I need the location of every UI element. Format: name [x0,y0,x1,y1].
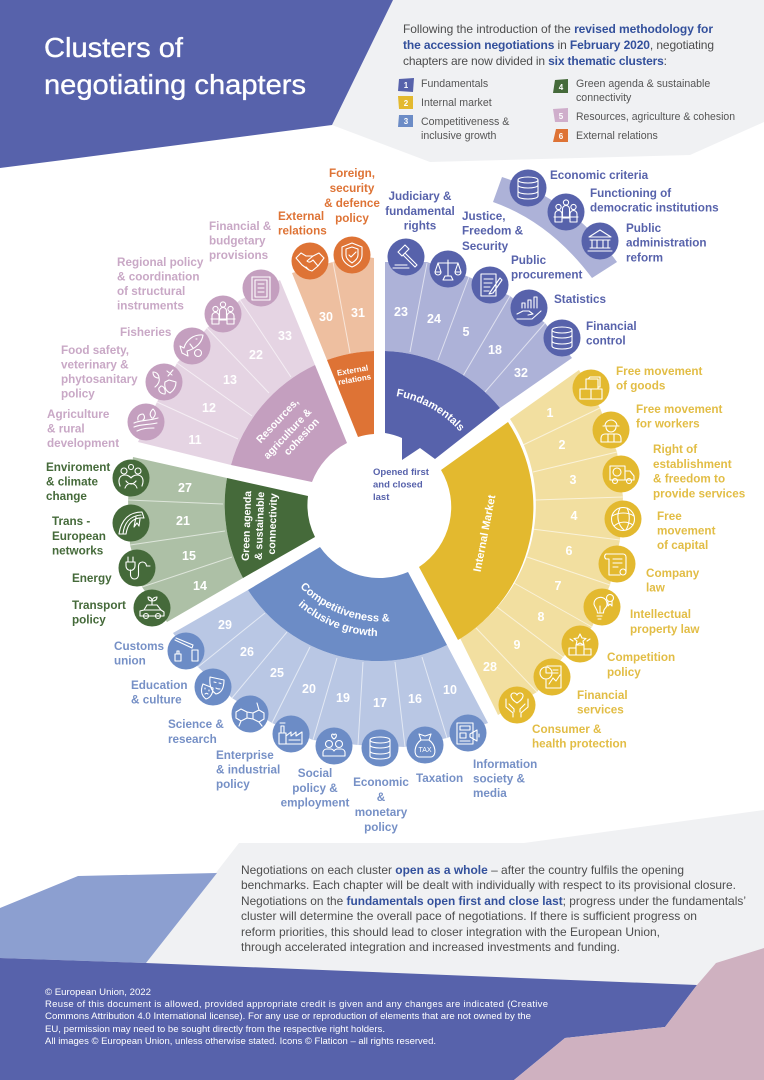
chapter labels: Resources: Fisheries [120,326,172,339]
chapter numbers [483,406,578,674]
icon: globe [604,500,642,538]
icon: fields [128,404,164,440]
legend item 1 [398,78,488,92]
title [44,32,306,100]
chapter numbers: 27 [178,481,192,495]
chapter labels: Fundamentals: Financial [586,320,637,333]
chapter labels: Green agenda: Enviroment [46,461,110,474]
icon: financial document [534,658,570,696]
cluster name: Internal Market: Internal Market [472,494,498,573]
chapter labels: External relations: policy [335,212,369,225]
cluster name: Fundamentals: Fundamentals [396,388,464,431]
chapter labels: Resources: & rural [47,422,85,436]
icon: car and plant [134,590,170,626]
legend [398,78,735,142]
legend item 4: Green agenda & sustainable [576,78,710,90]
icon: democratic institutions [548,194,584,230]
chapter labels: Green agenda: change [46,490,87,503]
legend item 1: 1 [404,81,409,90]
chapter numbers [188,329,292,447]
cluster name: Green agenda: connectivity [266,493,280,555]
panel: Internal Market cluster [419,365,746,750]
chapter labels: Resources: policy [61,388,95,400]
chapter labels: Internal Market: policy [607,666,641,679]
cluster name: External relations: External [336,363,369,378]
chapter labels: Competitiveness: media [473,787,507,800]
chapter numbers: 22 [249,348,263,362]
icon: podium [562,626,598,662]
icon: clipboard [242,270,280,306]
periwinkle shape [0,873,217,963]
chapter numbers: 15 [182,549,196,563]
icon: family and heart [316,728,352,764]
functioning of democratic institutions label: democratic institutions [590,202,719,214]
copyright text: © European Union, 2022 [45,987,151,998]
legend item 5: 5 [559,112,564,121]
body text: benchmarks. Each chapter will be dealt with individually with respect to its provisional closure. [241,878,736,892]
chapter numbers: 19 [336,691,350,705]
chapter labels: Green agenda: European [52,530,106,543]
chapter labels: Competitiveness: society & [473,772,526,786]
chapter labels: Green agenda: Trans - [52,515,90,528]
icon: three people [204,296,242,332]
cluster name: External relations: relations [337,372,372,387]
chapter labels: Resources: veterinary & [61,358,129,372]
panel: External relations cluster [278,167,380,437]
legend item 4 [553,78,710,104]
public administration reform label: reform [626,252,663,264]
chapter numbers [394,305,528,380]
cluster name: Green agenda: Green agenda [240,491,254,561]
chapter labels: Fundamentals: rights [404,220,437,232]
icon: public administration building [582,222,618,260]
legend item 6: 6 [559,132,564,141]
chapter numbers: 29 [218,618,232,632]
chapter labels: Internal Market: for workers [636,418,700,430]
chapter labels: Internal Market: Right of [653,443,697,456]
cluster name: Resources: agriculture & [261,406,315,462]
chapter labels: Fundamentals: control [586,334,626,348]
title: negotiating chapters [44,69,306,100]
chapter numbers: 31 [351,306,365,320]
chapter labels: Resources: Regional policy [117,256,203,269]
title: Clusters of [44,32,183,63]
chapter numbers: 12 [202,401,216,415]
chapter labels: Internal Market: Free movement [636,403,722,416]
chapter labels: Green agenda: & climate [46,476,98,488]
chapter numbers: 24 [427,312,441,326]
chapter labels: Resources: provisions [209,249,269,262]
icon: factory [272,716,310,752]
chapter labels: Internal Market: Competition [607,651,675,664]
cluster band: Resources [231,365,347,482]
icon: plug [118,550,156,586]
chapter labels: Fundamentals: Security [462,240,509,253]
legend item 2: Internal market [421,97,492,109]
panel: Fundamentals cluster [385,190,637,460]
chapter labels: Resources: Agriculture [47,408,109,421]
icon: worker [592,412,630,448]
legend item 2: 2 [404,99,409,108]
legend item 4: 4 [559,83,564,92]
chapter labels: Internal Market: establishment [653,458,732,471]
chapter labels: Internal Market: law [646,582,666,594]
cluster band: Competitiveness [248,547,447,661]
chapter labels: Competitiveness: Taxation [416,772,463,785]
chapter labels: Competitiveness: & [377,791,386,804]
cluster band: Fundamentals [385,351,500,460]
chapter labels: Competitiveness: employment [281,796,350,810]
chapter labels: Internal Market: Consumer & [532,723,602,736]
icon: tax bag [406,726,444,764]
body text: through accelerated integration and increased investments and funding. [241,940,620,954]
chapter labels: Resources: budgetary [209,234,266,248]
chapter labels: Competitiveness: Economic [353,776,409,789]
chapter labels: External relations: External [278,210,324,223]
chapter labels: Resources: development [47,437,119,450]
chapter numbers: 6 [566,544,573,558]
chapter labels: Internal Market: of goods [616,380,666,392]
chapter labels: Internal Market [532,365,746,750]
chapter labels: Internal Market: movement [657,524,716,538]
top grey background [332,0,764,162]
panel: administration arc [493,169,719,278]
cluster band: External relations [327,351,374,437]
bottom grey background [146,810,764,990]
icon: handshake [292,242,328,280]
chapter numbers: 26 [240,645,254,659]
icon: road bridge [112,504,150,542]
pink corner shape [514,948,764,1080]
chapter labels: Internal Market: property law [630,623,700,636]
title panel [0,0,393,168]
icon: gavel [388,238,424,276]
chapter labels: Competitiveness: research [168,733,217,746]
public administration reform label: Public [626,222,661,235]
chapter labels: Competitiveness: Customs [114,640,164,653]
chapter labels: External relations: security [330,182,375,195]
icon: theatre masks [194,668,232,706]
chapter labels: Green agenda: policy [72,614,106,626]
chapter labels: Internal Market: & freedom to [653,472,725,486]
chapter labels: Competitiveness: policy [216,778,250,791]
chapter numbers: 11 [188,433,202,447]
chapter labels: Internal Market: provide services [653,488,746,500]
chapter numbers: 32 [514,366,528,380]
chapter labels: Competitiveness: Science & [168,718,224,731]
cluster name: Competitiveness line 1: Competitiveness & [302,583,390,622]
icon: hands and heart [498,686,536,724]
chapter labels: Fundamentals: Judiciary & [388,190,452,203]
chapter labels: Fundamentals: fundamental [385,205,455,218]
chapter labels: Green agenda [46,461,126,626]
chapter labels: Fundamentals: Statistics [554,293,606,306]
chapter labels: Fundamentals: procurement [511,268,583,282]
chapter numbers: 23 [394,305,408,319]
icon: molecule [232,696,268,732]
chapter numbers: 3 [570,473,577,487]
icon: shield [334,236,370,274]
icon: news and megaphone [450,714,486,752]
legend item 6: External relations [576,130,658,142]
intro text: Following the introduction of the revised methodology for [403,22,713,36]
cluster name: Resources: cohesion [282,416,322,458]
legend item 5 [553,108,735,123]
icon: food plants [146,364,182,400]
legend item 5: Resources, agriculture & cohesion [576,111,735,123]
icon: statistics hand [510,290,548,326]
chapter numbers: 20 [302,682,316,696]
copyright text [45,987,548,1047]
chapter labels: Resources: of structural [117,285,185,298]
icon: customs barrier [168,632,204,670]
cluster name: Competitiveness line 2: inclusive growth [298,599,377,636]
chapter numbers: 9 [514,638,521,652]
intro text: chapters are now divided in six thematic clusters: [403,54,667,68]
chapter labels: Fundamentals: Justice, [462,210,506,223]
icon: coins economic policy [362,730,398,766]
legend item 3: 3 [404,117,409,126]
chapter labels: Internal Market: health protection [532,738,627,750]
chapter labels: Fundamentals [385,190,637,348]
chapter labels: Resources [47,220,272,450]
public administration reform label: administration [626,236,707,250]
chapter labels: Competitiveness: Social [298,767,332,780]
chapter labels: Competitiveness [114,640,537,834]
chapter labels: External relations: & defence [324,197,380,210]
copyright text: Commons Attribution 4.0 International license). For any use or reproduction of elements that are not owned by the [45,1011,531,1022]
chapter labels: Competitiveness: Enterprise [216,749,274,762]
copyright text: EU, permission may need to be sought directly from the respective right holders. [45,1024,385,1035]
chapter labels: Internal Market: Free movement [616,365,702,378]
cluster name: External relations [336,363,372,387]
cluster name: Green agenda [240,491,280,561]
chapter labels: Green agenda: networks [52,544,104,558]
chapter labels: Internal Market: Financial [577,689,628,702]
chapter labels: External relations [278,167,380,238]
legend item 2 [398,96,492,109]
intro text: the accession negotiations in February 2020, negotiating [403,38,714,52]
chapter numbers: 7 [555,579,562,593]
legend item 3: Competitiveness & [421,116,509,128]
icon: scroll [598,546,636,582]
legend item 1: Fundamentals [421,78,488,90]
chapter numbers: 1 [547,406,554,420]
functioning of democratic institutions label: Functioning of [590,187,671,200]
chapter numbers: 33 [278,329,292,343]
centre text: last [373,492,390,503]
centre text: Opened first [373,467,429,478]
body text: Negotiations on each cluster open as a whole – after the country fulfils the opening [241,863,684,877]
chapter labels: Resources: phytosanitary [61,373,138,386]
icon: coins financial control [544,320,580,356]
chapter numbers: 14 [193,579,207,593]
chapter labels: Competitiveness: policy & [292,782,338,795]
chapter numbers: 4 [571,509,578,523]
intro text [403,22,714,68]
icon: economic criteria coins [510,170,546,206]
chapter numbers: 13 [223,373,237,387]
chapter numbers [176,481,207,593]
icon: document and pen [472,266,508,304]
chapter labels: Green agenda: Transport [72,599,126,612]
chapter labels: Competitiveness: Education [131,679,188,692]
chapter numbers: 21 [176,514,190,528]
chapter labels: Green agenda: Energy [72,572,112,585]
panel: Competitiveness cluster [114,547,537,834]
icon: truck [602,456,640,492]
chapter numbers: 28 [483,660,497,674]
centre text: and closed [373,480,423,490]
chapter numbers: 18 [488,343,502,357]
chapter numbers: 2 [559,438,566,452]
chapter labels: Resources: Financial & [209,220,271,233]
panel: Resources cluster [47,220,347,482]
chapter numbers [319,306,365,324]
chapter labels: External relations: relations [278,224,327,238]
chapter labels: Internal Market: Free [657,510,682,523]
cluster band: Green agenda [225,478,315,578]
icon: scales [430,250,466,288]
chapter labels: Resources: & coordination [117,270,199,284]
chapter labels: Resources: instruments [117,300,184,312]
chapter labels: Competitiveness: policy [364,821,398,834]
chapter numbers: 25 [270,666,284,680]
cluster band: Internal Market [419,422,533,640]
icon: tax bag: TAX [418,747,432,754]
chapter labels: External relations: Foreign, [329,167,375,180]
economic criteria label: Economic criteria [550,169,649,182]
body text: reform priorities, this should lead to closer integration with the European Union, [241,925,660,939]
chapter labels: Fundamentals: Public [511,254,546,267]
body text: cluster will determine the overall pace of negotiations. If there is sufficient progress on [241,909,697,923]
chapter labels: Competitiveness: union [114,654,146,668]
chapter numbers: 10 [443,683,457,697]
chapter labels: Competitiveness: & culture [131,694,182,706]
chapter labels: Competitiveness: monetary [355,806,408,819]
chapter labels: Internal Market: services [577,704,624,716]
cluster name: Resources [254,396,322,462]
panel: Green agenda cluster [46,457,315,626]
chapter labels: Internal Market: of capital [657,539,708,552]
chapter labels: Competitiveness: Information [473,758,537,771]
copyright text: All images © European Union, unless otherwise stated. Icons © Flaticon – all rights reserved. [45,1036,436,1047]
chapter labels: Internal Market: Intellectual [630,608,691,621]
chapter numbers [218,618,457,710]
legend item 3: inclusive growth [421,130,496,142]
cluster name: Green agenda: & sustainable [253,491,267,560]
chapter numbers: 16 [408,692,422,706]
chapter labels: Resources: Food safety, [61,344,129,357]
chapter labels: Fundamentals: Freedom & [462,224,524,238]
legend item 3 [398,115,509,142]
body text [241,863,746,954]
icon: fish [174,328,210,364]
body text: Negotiations on the fundamentals open first and close last; progress under the fundamentals’ [241,894,746,908]
icon: boxes [572,370,610,406]
legend item 4: connectivity [576,92,632,104]
copyright text: Reuse of this document is allowed, provided appropriate credit is given and any changes are indicated (Creative [45,999,548,1010]
chapter numbers: 30 [319,310,333,324]
chapter numbers: 17 [373,696,387,710]
chapter numbers: 5 [463,325,470,339]
icon: bulb [584,588,620,626]
chapter labels: Internal Market: Company [646,567,699,580]
icon: environment [112,460,150,496]
chapter labels: Competitiveness: & industrial [216,764,280,776]
cluster name: Resources: Resources, [254,396,302,446]
footer blue panel [0,958,697,1080]
chapter numbers: 8 [538,610,545,624]
